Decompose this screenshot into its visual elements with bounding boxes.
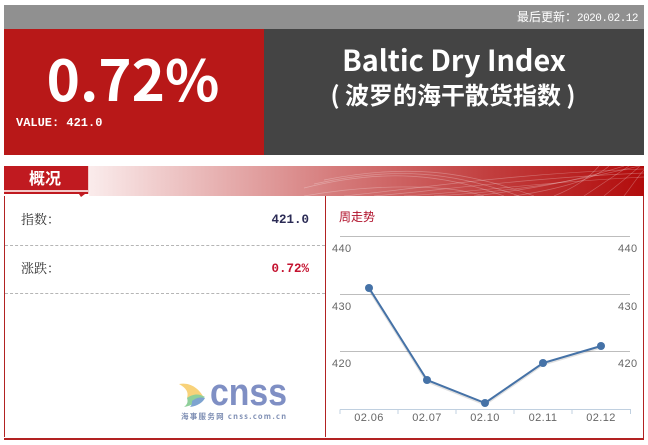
- left y labels: 430: [332, 301, 352, 313]
- percentage change: 0.72%: [47, 36, 219, 118]
- logo mark: [179, 384, 205, 407]
- x labels: 02.12: [586, 412, 616, 424]
- chart heading: 周走势: [339, 208, 375, 225]
- data line: [365, 284, 605, 407]
- left y labels: [332, 243, 352, 370]
- right y labels: [618, 243, 638, 370]
- index number: 421.0: [271, 213, 309, 227]
- index value: VALUE: 421.0: [16, 116, 102, 130]
- logo caption: 海事服务网 cnss.com.cn: [181, 411, 286, 422]
- logo: cnss: [179, 380, 287, 422]
- right y labels: 420: [618, 358, 638, 370]
- x axis: [340, 410, 631, 414]
- last updated text: 最后更新：2020.02.12: [517, 10, 638, 25]
- bottom border left: [4, 438, 326, 440]
- change label: 涨跌：: [21, 258, 60, 277]
- update bar: [4, 5, 644, 29]
- x labels: [354, 412, 616, 424]
- left y labels: 420: [332, 358, 352, 370]
- english title: Baltic Dry Index: [342, 39, 566, 80]
- x labels: 02.07: [412, 412, 442, 424]
- panel: title: [264, 29, 644, 155]
- index label: 指数：: [21, 209, 60, 228]
- section header band: [89, 166, 644, 196]
- tab label: 概况: [29, 165, 61, 189]
- row: change: [5, 245, 325, 294]
- x labels: 02.06: [354, 412, 384, 424]
- x labels: 02.11: [529, 412, 557, 424]
- line chart: [332, 236, 638, 424]
- right y labels: 430: [618, 301, 638, 313]
- left y labels: 440: [332, 243, 352, 255]
- panel: weekly trend frame: [326, 196, 644, 440]
- section tab: overview: [4, 165, 89, 197]
- right y labels: 440: [618, 243, 638, 255]
- chinese title: ( 波罗的海干散货指数 ): [330, 76, 576, 111]
- x labels: 02.10: [470, 412, 500, 424]
- change number: 0.72%: [271, 262, 309, 276]
- row: index: [5, 196, 325, 246]
- panel: value: [4, 29, 264, 155]
- panel: overview table: [4, 196, 326, 437]
- tab background: [4, 166, 89, 197]
